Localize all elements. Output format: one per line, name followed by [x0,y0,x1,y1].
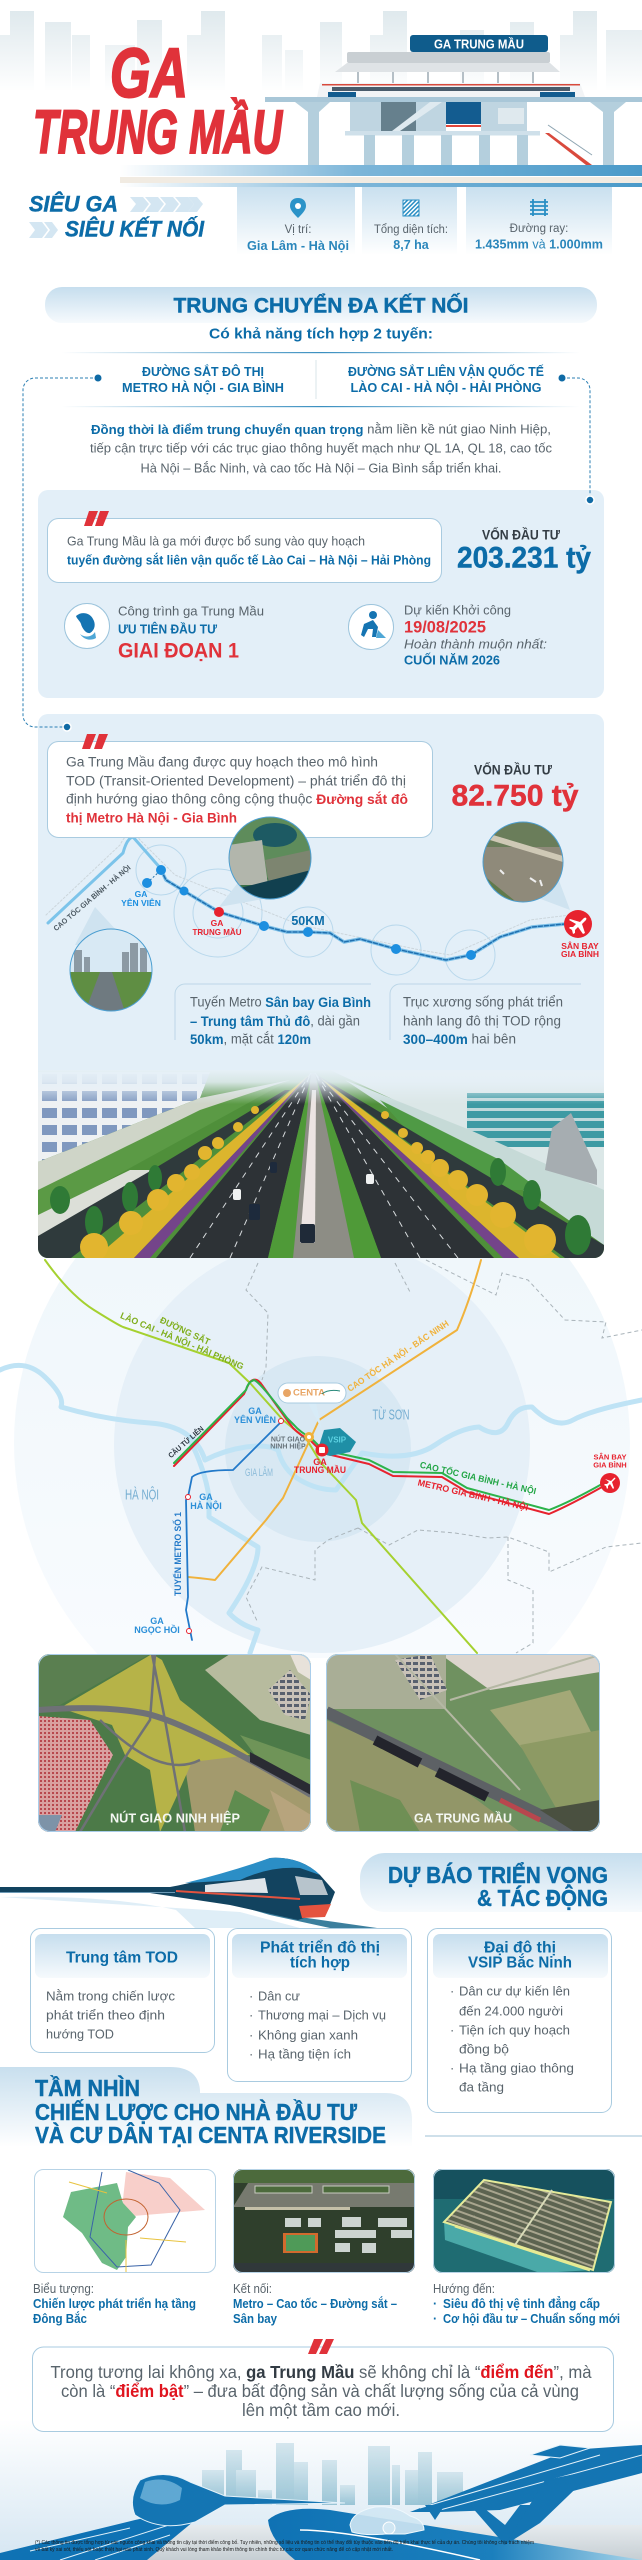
section heading: multi connection: TRUNG CHUYỂN ĐA KẾT NỐI [174,294,468,318]
map labels: NGỌC HỒI [134,1624,180,1635]
metro description: Tuyến Metro Sân bay Gia Bình [190,994,371,1010]
rivers [0,1365,642,1653]
stat card: location [237,187,355,255]
photo bubble: airport [483,822,570,910]
map labels: YÊN VIÊN [234,1414,276,1425]
route labels: 50KM [291,914,325,928]
callout: TOD [48,734,432,838]
icon: construction worker [348,604,394,650]
card: VSIP: đến 24.000 người [459,2004,563,2018]
metro description: – Trung tâm Thủ đô, dài gần [190,1014,360,1028]
card: integrated urban development [228,1928,412,2082]
car [350,2507,424,2535]
illustration: train [0,1858,377,1928]
investment figure two: 82.750 tỷ [452,780,579,812]
card: VSIP: Tiện ích quy hoạch [459,2022,570,2038]
panel: investment two and metro route [38,714,604,1070]
section heading: outlook [360,1853,642,1912]
closing quote: lên một tầm cao mới. [242,2400,400,2420]
card: VSIP: đa tầng [459,2080,504,2094]
map markers: VSIP [328,1436,347,1444]
routes [122,364,544,395]
caption: direction: Hướng đến: [433,2282,495,2296]
caption: connection [233,2282,397,2326]
station sign [410,35,548,52]
closing quote [32,2339,614,2432]
route labels: SÂN BAY [561,940,599,951]
TOD corridor description: Trục xương sống phát triển [403,994,563,1010]
transport lines [45,1260,602,1653]
caption: symbol: Chiến lược phát triển hạ tầng [33,2297,196,2311]
routes: ĐƯỜNG SẮT ĐÔ THỊ [142,364,264,379]
schedule text [404,602,547,668]
priority text: ƯU TIÊN ĐẦU TƯ [118,622,217,636]
section heading: strategic vision: TẦM NHÌN [35,2074,140,2101]
photo bubble: urban area [219,817,311,907]
disclaimer: về bất kỳ sai sót, thiếu sót hoặc thiệt hại nào phát sinh. Quý khách vui lòng tham khảo thêm thông tin chính thức từ các cơ quan chức năng để có cập nhật mới nhất. [35,2546,393,2553]
closing quote: Trong tương lai không xa, ga Trung Mầu sẽ không chỉ là “điểm đến”, mà [50,2362,592,2382]
map labels: GA [313,1457,327,1467]
callout: new station: Ga Trung Mầu là ga mới được bổ sung vào quy hoạch [67,534,365,548]
caption: connection: Metro – Cao tốc – Đường sắt – [233,2296,397,2311]
stat card: rail gauge: 1.435mm và 1.000mm [475,238,603,252]
map labels: GIA BÌNH [593,1460,627,1470]
illustration: elevated station [120,52,642,187]
schedule text: 19/08/2025 [404,618,486,636]
map labels: SÂN BAY [593,1452,627,1462]
section heading: multi connection: Có khả năng tích hợp 2 tuyến: [209,326,433,342]
stat card: rail gauge [466,187,612,255]
investment figure two: VỐN ĐẦU TƯ [474,762,553,778]
provincial borders [246,1260,642,1653]
map labels: HÀ NỘI [190,1500,222,1511]
section heading: multi connection [45,287,597,342]
metro description: 50km, mặt cắt 120m [190,1032,311,1046]
section heading: strategic vision: CHIẾN LƯỢC CHO NHÀ ĐẦU TƯ [35,2098,358,2125]
stat card: location: Vị trí: [285,224,311,236]
priority text: Công trình ga Trung Mầu [118,604,264,618]
callout: new station: tuyến đường sắt liên vận quốc tế Lào Cai – Hà Nội – Hải Phòng [67,552,431,568]
callout: TOD: TOD (Transit-Oriented Development) – phát triển đô thị [66,774,406,788]
footer illustration: city and transport [0,2443,642,2560]
disclaimer: (*) Các thông tin được tổng hợp từ các nguồn công khai và thông tin cậy tại thời điểm công bố. Tuy nhiên, những số liệu và thông tin có thể thay đổi tùy thuộc vào tiến độ triển khai thực tế của dự án. Chúng tôi không chịu trách nhiệm [35,2539,534,2546]
map labels: CẦU TỨ LIÊN [166,1423,206,1460]
card: TOD centre: phát triển theo định [46,2008,165,2022]
map labels: NINH HIỆP [270,1442,306,1450]
title: GA [110,34,188,112]
caption: connection: Sân bay [233,2312,277,2326]
route map [46,834,592,960]
caption: direction: Cơ hội đầu tư – Chuẩn sống mới [443,2312,620,2326]
icon: priority investment [64,604,110,648]
route labels: GIA BÌNH [561,949,599,959]
photo bubble: city road [70,907,152,1012]
map labels [119,1309,627,1635]
slogan: SIÊU GA [29,192,118,216]
priority text: GIAI ĐOẠN 1 [118,640,239,662]
stat card: rail gauge: Đường ray: [510,223,568,235]
image: regional map [34,2169,216,2273]
photo: Ninh Hiep interchange: NÚT GIAO NINH HIỆP [110,1810,240,1826]
map labels: GA [248,1406,262,1416]
right road [268,2509,642,2560]
card: TOD centre: Nằm trong chiến lược [46,1988,176,2004]
stat card: area: 8,7 ha [393,238,430,252]
caption: direction: · [433,2297,437,2311]
card: VSIP: · [450,1984,454,1998]
card: integrated urban development: tích hợp [290,1954,350,1972]
thin station circles [136,845,495,980]
routes: METRO HÀ NỘI - GIA BÌNH [122,380,284,395]
intro paragraph: Hà Nội – Bắc Ninh, và cao tốc Hà Nội – Gia Bình sắp triển khai. [140,460,502,476]
stat card: location: Gia Lâm - Hà Nội [247,239,349,253]
map markers [186,1383,620,1634]
card: VSIP: Đại đô thị [484,1940,556,1956]
callout: new station [48,511,442,582]
station sign: GA TRUNG MẦU [434,36,524,52]
left train [132,2474,345,2526]
section heading: outlook: & TÁC ĐỘNG [477,1884,608,1911]
card: TOD centre: hướng TOD [46,2026,114,2042]
map labels: CAO TỐC HÀ NỘI - BẮC NINH [345,1317,451,1394]
caption: symbol [33,2282,196,2326]
stat card: area [362,187,457,255]
route labels: GA [211,918,223,928]
schedule text: Dự kiến Khởi công [404,602,511,618]
map labels: HÀ NỘI [125,1486,159,1504]
card: TOD centre [30,1928,214,2052]
caption: symbol: Biểu tượng: [33,2282,94,2296]
schedule text: Hoàn thành muộn nhất: [404,636,547,652]
card: TOD centre: Trung tâm TOD [66,1950,178,1966]
investment figure two [452,762,579,812]
image: satellite city [433,2169,615,2273]
card: integrated urban development: Thương mại – Dịch vụ [258,2008,386,2022]
title: TRUNG MẦU [33,98,283,166]
intro paragraph: Đồng thời là điểm trung chuyển quan trọng nằm liền kề nút giao Ninh Hiệp, [91,422,551,436]
slogan: SIÊU KẾT NỐI [65,216,205,242]
route labels: YÊN VIÊN [121,897,161,908]
card: VSIP: VSIP Bắc Ninh [468,1954,572,1972]
caption: direction [433,2282,620,2326]
card: VSIP: · [450,2060,454,2076]
photo: Trung Mau station: GA TRUNG MẦU [414,1810,512,1826]
stat card: area: Tổng diện tích: [374,224,448,236]
map labels: TRUNG MẦU [294,1465,346,1475]
card: VSIP: · [450,2022,454,2038]
header skyline background [0,11,642,90]
card: VSIP: Dân cư dự kiến lên [459,1984,570,1998]
route labels: GA [135,889,147,899]
schedule text: CUỐI NĂM 2026 [404,652,500,668]
section heading: strategic vision [0,2067,412,2148]
card: integrated urban development: · [249,2028,253,2042]
bridge [410,2445,642,2512]
map labels: NÚT GIAO [271,1434,306,1444]
caption: direction: · [433,2312,437,2326]
map labels: METRO GIA BÌNH - HÀ NỘI [417,1476,529,1513]
callout: TOD: thị Metro Hà Nội - Gia Bình [66,810,237,826]
routes: LÀO CAI - HÀ NỘI - HẢI PHÒNG [350,380,542,395]
card: integrated urban development: Dân cư [258,1988,300,2004]
TOD corridor description: hành lang đô thị TOD rộng [403,1014,561,1028]
connector: dashed link between routes and panels [23,374,594,731]
map markers: CENTA [293,1388,325,1398]
callout: TOD: Ga Trung Mầu đang được quy hoạch theo mô hình [66,754,378,770]
caption: direction: Siêu đô thị vệ tinh đẳng cấp [443,2296,600,2311]
route labels: CAO TỐC GIA BÌNH - HÀ NỘI [51,862,132,933]
photo: Trung Mau station [326,1654,600,1832]
map labels: LÀO CAI - HÀ NỘI - HẢI PHÒNG [119,1309,246,1372]
investment figure: VỐN ĐẦU TƯ [482,528,561,542]
caption: symbol: Đông Bắc [33,2311,87,2326]
map labels: GA [150,1616,164,1626]
left track [0,2502,217,2560]
section heading: strategic vision: VÀ CƯ DÂN TẠI CENTA RIVERSIDE [35,2121,386,2148]
caption: connection: Kết nối: [233,2282,272,2296]
photo: metro boulevard [38,1070,604,1261]
investment figure [457,528,591,574]
card: integrated urban development: · [249,2046,253,2062]
panel: investment one [38,490,604,698]
map labels: TỪ SƠN [372,1406,410,1424]
card: integrated urban development: Hạ tầng tiện ích [258,2046,351,2062]
image: connected urban area [233,2169,415,2273]
map labels: CAO TỐC GIA BÌNH - HÀ NỘI [419,1459,537,1496]
callout: TOD: định hướng giao thông công cộng thuộc Đường sắt đô [66,792,408,806]
routes: ĐƯỜNG SẮT LIÊN VẬN QUỐC TẾ [348,364,544,379]
card: VSIP [428,1928,612,2112]
map labels: TUYẾN METRO SỐ 1 [172,1512,183,1596]
closing quote: còn là “điểm bật” – đưa bất động sản và chất lượng sống của cả vùng [61,2381,579,2401]
TOD corridor description: 300–400m hai bên [403,1032,516,1046]
card: integrated urban development: · [249,2008,253,2022]
investment figure: 203.231 tỷ [457,542,591,574]
section heading: outlook: DỰ BÁO TRIỂN VỌNG [388,1861,608,1888]
intro paragraph [90,422,552,476]
map labels: GIA LÂM [245,1466,273,1479]
route labels: TRUNG MẦU [192,927,242,937]
TOD corridor description [390,984,581,1046]
photo: Ninh Hiep interchange [38,1654,311,1832]
map labels: GA [199,1492,213,1502]
card: integrated urban development: · [249,1988,253,2004]
card: integrated urban development: Không gian xanh [258,2028,358,2042]
slogan [29,192,205,242]
map: regional connections [0,1258,642,1654]
map labels: ĐƯỜNG SẮT [158,1314,212,1347]
metro description [175,984,371,1046]
card: VSIP: đồng bộ [459,2042,509,2056]
card: VSIP: Hạ tầng giao thông [459,2060,574,2076]
card: integrated urban development: Phát triển đô thị [260,1940,380,1956]
route labels [51,862,599,959]
intro paragraph: tiếp cận trực tiếp với các trục giao thông huyết mạch như QL 1A, QL 18, cao tốc [90,440,552,456]
title [33,34,283,166]
priority text [118,604,264,662]
disclaimer [35,2539,534,2553]
